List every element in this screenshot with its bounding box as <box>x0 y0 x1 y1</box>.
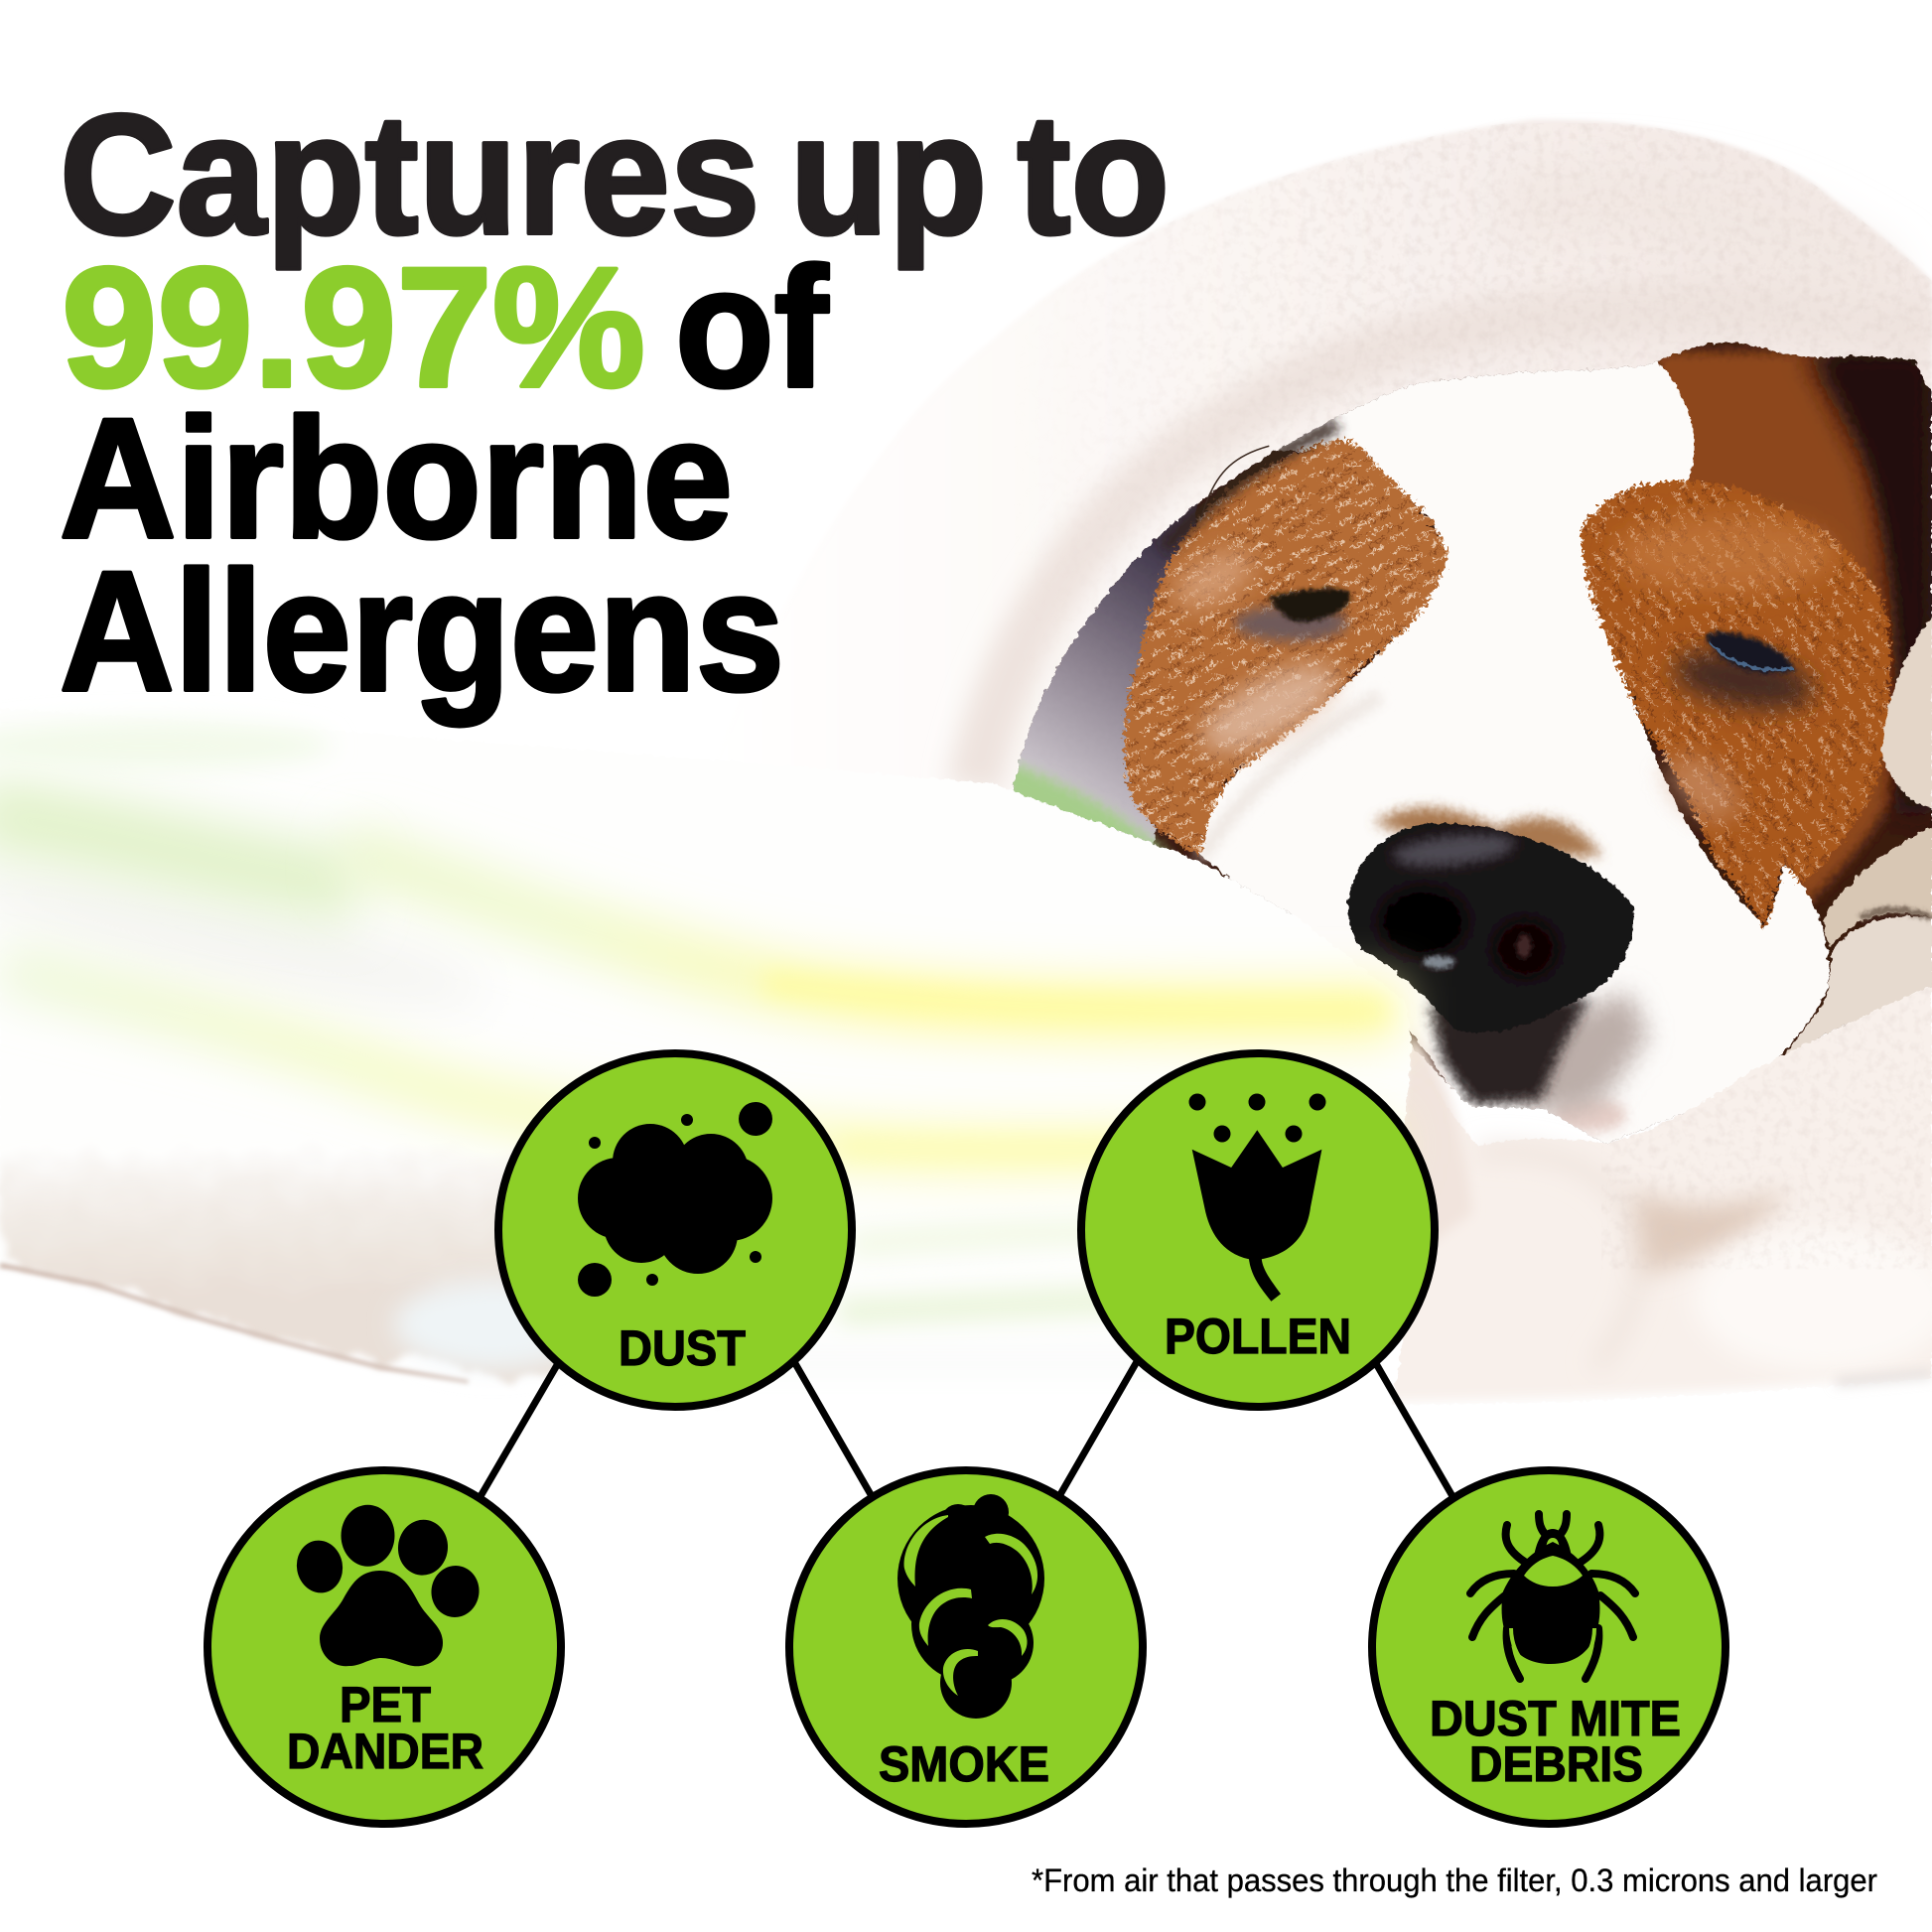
left nostril <box>1381 890 1465 954</box>
tan band in fold <box>1632 1189 1787 1276</box>
mid stripe <box>0 967 1392 1151</box>
icon: dust mite <box>1470 1514 1635 1679</box>
icon: smoke puffs <box>897 1494 1044 1719</box>
upper tan fold at lower right <box>1825 827 1932 946</box>
pale streak on right cheek <box>1655 743 1750 834</box>
faint green at heading foot <box>0 721 333 770</box>
plush texture lower right <box>1601 986 1932 1269</box>
lower right blanket <box>1392 986 1932 1420</box>
hazy grey shading on blanket <box>0 839 495 1034</box>
soft bottom edge <box>1392 1392 1932 1420</box>
blue lid highlight <box>1711 643 1794 670</box>
icon: dust cloud <box>578 1102 772 1297</box>
line: pollen to dust mite debris <box>1370 1353 1456 1503</box>
headline: of <box>675 232 829 423</box>
nose shine <box>1391 829 1517 872</box>
label: pet dander: PET <box>340 1677 431 1732</box>
hood rim shading <box>973 308 1932 788</box>
dark band around right eye <box>1668 641 1819 719</box>
cool fringe tip <box>394 1280 592 1369</box>
label: smoke: SMOKE <box>879 1736 1049 1792</box>
white face base <box>1195 361 1829 1152</box>
hair over hood <box>1201 446 1269 517</box>
chin shadow <box>1516 992 1649 1115</box>
pale floor below blanket <box>690 1343 1207 1380</box>
badge: dust <box>498 1053 852 1407</box>
upper stripe <box>345 850 1399 1013</box>
headline highlight: 99.97%: 99.97% <box>62 232 645 423</box>
hood fold shadow <box>1503 202 1885 296</box>
muzzle bridge shade <box>1201 696 1380 857</box>
icon: tulip with pollen dots <box>1189 1094 1326 1302</box>
badge: pollen <box>1081 1053 1435 1407</box>
blanket lump at right edge <box>1881 617 1932 807</box>
pale tan lower fold <box>1762 916 1932 1084</box>
dog inside the hood opening <box>986 333 1932 1152</box>
fold shadow along blanket lip <box>1478 1151 1640 1368</box>
beige strip between muzzle and front blanket <box>1392 1029 1472 1244</box>
faint low stripe <box>850 1230 1380 1244</box>
right brown patch <box>1580 481 1890 929</box>
dark edge under hood <box>1165 425 1337 548</box>
line: pollen to smoke <box>1055 1353 1142 1503</box>
dark band around left eye <box>1235 607 1348 640</box>
headline: Airborne <box>60 383 733 574</box>
badge: pet dander <box>207 1470 561 1824</box>
label: pollen: POLLEN <box>1165 1309 1351 1364</box>
right eye <box>1704 630 1796 673</box>
faint green low band <box>838 1294 1343 1312</box>
dark hood interior <box>986 333 1932 1146</box>
bright lump lower right <box>1694 1228 1932 1371</box>
headline: Captures up to <box>60 79 1170 270</box>
label: dust mite debris: DEBRIS <box>1469 1736 1643 1792</box>
green band far left <box>0 813 357 888</box>
glint on right nostril <box>1517 934 1532 959</box>
label: pet dander: DANDER <box>287 1724 483 1779</box>
hood plush texture <box>1225 123 1932 457</box>
upper stripe core <box>763 982 1386 1011</box>
white floor below the blanket <box>0 1288 517 1405</box>
bright orange brow on right patch <box>1614 515 1836 594</box>
pink chin <box>1553 1098 1626 1133</box>
left blanket fringe <box>0 1109 727 1390</box>
green reflection beside muzzle <box>998 758 1171 863</box>
shadow at right bottom <box>1836 1374 1932 1382</box>
connector lines <box>477 1353 1456 1503</box>
label: pet dander <box>287 1677 483 1779</box>
line: dust to smoke <box>789 1353 876 1503</box>
far brown head fur <box>1651 351 1900 905</box>
nostril glint <box>1423 956 1455 968</box>
mid stripe core <box>838 1144 1386 1149</box>
left brown patch <box>1125 441 1448 855</box>
front white blanket <box>0 709 1412 1368</box>
nose <box>1348 823 1634 1033</box>
badge: dust mite debris <box>1372 1470 1725 1824</box>
hood blanket <box>1044 119 1932 861</box>
pale streak area on left cheek <box>1187 646 1350 770</box>
dark shadow at right of head <box>1805 351 1932 813</box>
badge: smoke <box>789 1470 1143 1824</box>
under-nose dark <box>1430 998 1589 1105</box>
label: dust mite debris <box>1430 1691 1681 1792</box>
tan mark above nose <box>1374 807 1601 857</box>
lavender shadow inside hood <box>986 481 1201 863</box>
label: dust: DUST <box>619 1320 746 1376</box>
icon: paw print <box>293 1505 483 1666</box>
headline <box>60 79 1170 727</box>
background photo: sleepy dog wrapped in a blanket <box>0 119 1932 1405</box>
label: dust mite debris: DUST MITE <box>1430 1691 1681 1746</box>
footnote: *From air that passes through the filter, 0.3 microns and larger <box>1032 1863 1877 1898</box>
pale streak above left cheek <box>1165 538 1263 621</box>
right nostril <box>1496 921 1555 976</box>
left eye <box>1268 589 1350 622</box>
fold gap shadow <box>1861 910 1932 918</box>
headline: Allergens <box>60 536 784 727</box>
line: dust to pet dander <box>477 1353 564 1503</box>
blanket shadow line <box>0 1266 469 1382</box>
